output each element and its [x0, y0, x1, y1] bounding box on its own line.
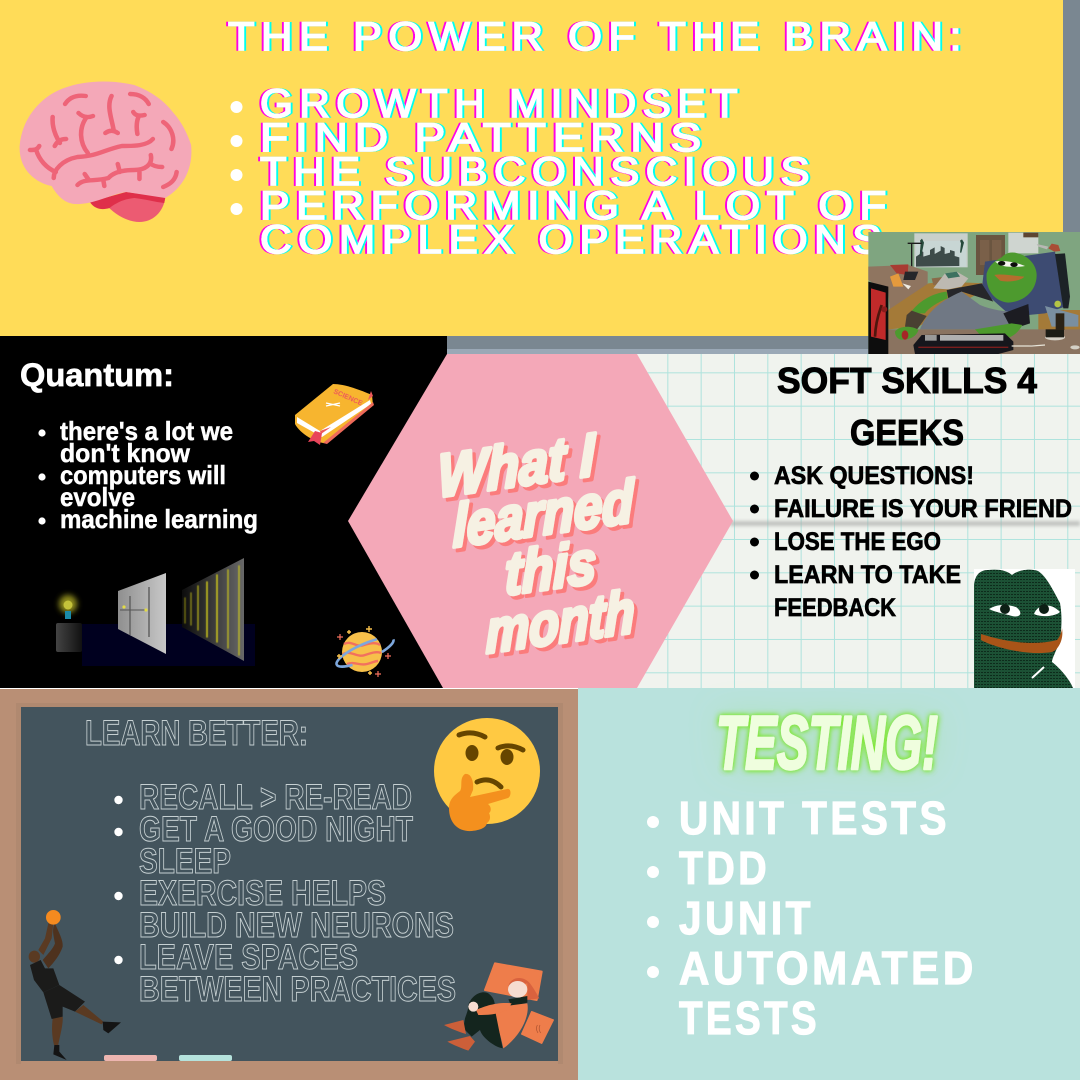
list: quantum bullets: computers will: [60, 460, 226, 490]
image: matrix frog: [974, 569, 1075, 688]
list: learn better: LEAVE SPACES: [139, 938, 358, 977]
list: learn better: RECALL > RE-READ: [139, 778, 412, 817]
heading: soft skills 4 geeks: SOFT SKILLS 4: [777, 360, 1037, 401]
list: soft skills: ASK QUESTIONS!: [774, 462, 974, 490]
icon: girl hugging pillow: [444, 963, 553, 1051]
panel: central hexagon: [348, 354, 733, 688]
list: learn better: [114, 778, 456, 1009]
panel: testing: [578, 688, 1080, 1080]
list: testing items: UNIT TESTS: [679, 792, 950, 844]
title: what i learned this month: this: [505, 527, 596, 608]
list: soft skills: LEARN TO TAKE: [774, 561, 961, 589]
panel: chalkboard learn better: [0, 689, 578, 1080]
panel: quantum: [0, 336, 447, 688]
title: what i learned this month: [438, 420, 635, 666]
list: learn better: SLEEP: [139, 842, 231, 881]
list: learn better: BETWEEN PRACTICES: [139, 970, 456, 1009]
icon: thinking face: [434, 718, 540, 831]
background strip: lighter grey: [447, 349, 1080, 354]
image: frog at gaming desk: [868, 232, 1080, 354]
list: learn better: BUILD NEW NEURONS: [139, 906, 454, 945]
list: testing items: [647, 792, 977, 1044]
list: quantum bullets: [38, 416, 258, 534]
title: what i learned this month: month: [486, 577, 635, 666]
list: brain powers: PERFORMING A LOT OF: [260, 184, 893, 228]
list: soft skills: FEEDBACK: [774, 594, 896, 622]
title: what i learned this month: learned: [453, 466, 634, 560]
list: quantum bullets: there's a lot we: [60, 416, 233, 446]
list: quantum bullets: don't know: [60, 438, 191, 468]
heading: the power of the brain: THE POWER OF THE BRAIN:: [228, 15, 968, 59]
list: brain powers: THE SUBCONSCIOUS: [260, 150, 816, 194]
heading: soft skills 4 geeks: [777, 360, 1037, 453]
list: soft skills: LOSE THE EGO: [774, 528, 941, 556]
chalk: pink: [104, 1055, 157, 1061]
heading: quantum: Quantum:: [20, 357, 174, 393]
list: brain powers: GROWTH MINDSET: [260, 82, 744, 126]
list: soft skills: [750, 462, 1072, 622]
list: quantum bullets: machine learning: [60, 504, 258, 534]
list: testing items: TDD: [679, 842, 770, 894]
title: what i learned this month: What I: [438, 420, 596, 510]
chalk: mint: [179, 1055, 232, 1061]
heading: soft skills 4 geeks: GEEKS: [850, 412, 964, 453]
panel: the power of the brain: [0, 0, 1063, 336]
icon: brain: [20, 81, 191, 222]
list: testing items: AUTOMATED: [679, 942, 977, 994]
list: testing items: TESTS: [679, 992, 820, 1044]
icon: science book: [295, 384, 374, 445]
icon: basketball player: [29, 910, 121, 1060]
heading: learn better: LEARN BETTER:: [85, 714, 308, 753]
icon: ringed planet: [333, 626, 397, 677]
diagram: double slit experiment: [56, 558, 255, 666]
list: testing items: JUNIT: [679, 892, 814, 944]
panel: graph paper soft skills: [637, 354, 1080, 688]
list: brain powers: COMPLEX OPERATIONS: [260, 218, 888, 262]
list: learn better: EXERCISE HELPS: [139, 874, 386, 913]
background strip: grey wall: [0, 0, 1080, 354]
heading: testing: TESTING!: [716, 701, 938, 786]
icon: science book: SCIENCE: [332, 388, 364, 408]
list: learn better: GET A GOOD NIGHT: [139, 810, 413, 849]
list: brain powers: [230, 82, 893, 262]
list: brain powers: FIND PATTERNS: [260, 116, 708, 160]
list: quantum bullets: evolve: [60, 482, 135, 512]
